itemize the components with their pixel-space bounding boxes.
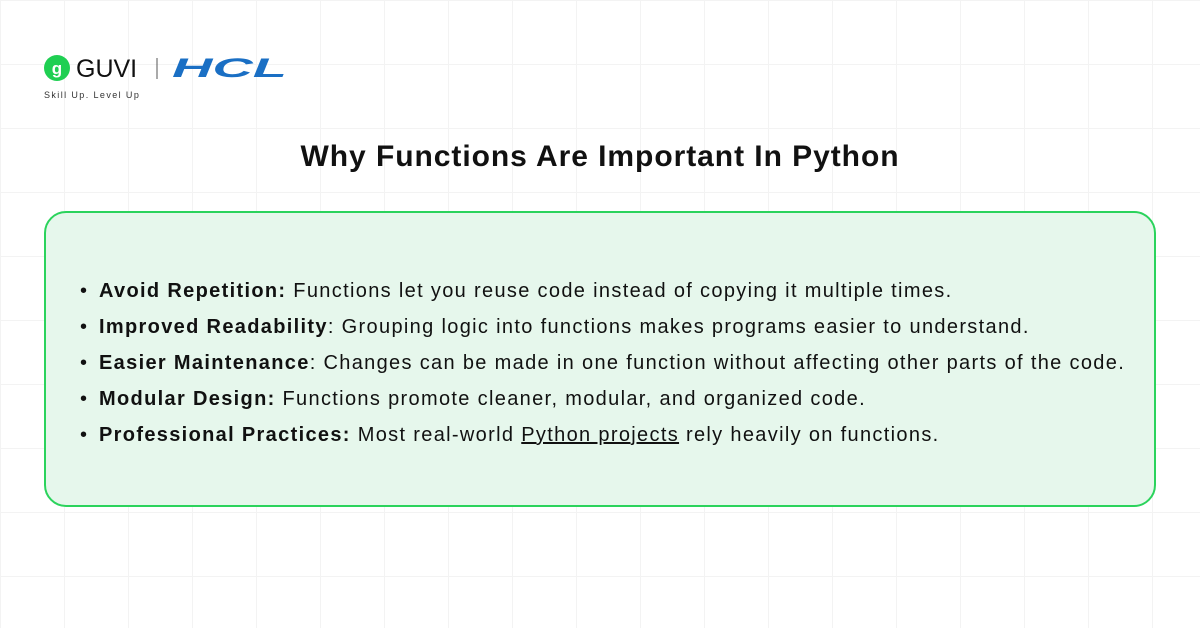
- text: GUVI: GUVI: [76, 55, 137, 83]
- panel: bullet list: Avoid Repetition: Functions let you reuse code instead of copying it multiple times.: [99, 280, 952, 302]
- title: Why Functions Are Important In Python: [300, 140, 900, 173]
- panel: bullet list: Easier Maintenance: Changes can be made in one function without affecting other parts of the code.: [99, 352, 1125, 374]
- panel: bullet list: Improved Readability: Grouping logic into functions makes programs easier to understand.: [99, 316, 1030, 338]
- icon: guvi circle: g: [52, 59, 62, 78]
- icon: guvi circle: [44, 55, 70, 81]
- tagline: Skill Up. Level Up: [44, 90, 140, 100]
- panel: bullet list: Professional Practices: Most real-world Python projects rely heavily on functions.: [99, 424, 940, 446]
- panel: bullet list: Modular Design: Functions promote cleaner, modular, and organized code.: [99, 388, 866, 410]
- logo: GUVI HCL: [44, 55, 287, 100]
- panel: bullet list: [44, 211, 1156, 507]
